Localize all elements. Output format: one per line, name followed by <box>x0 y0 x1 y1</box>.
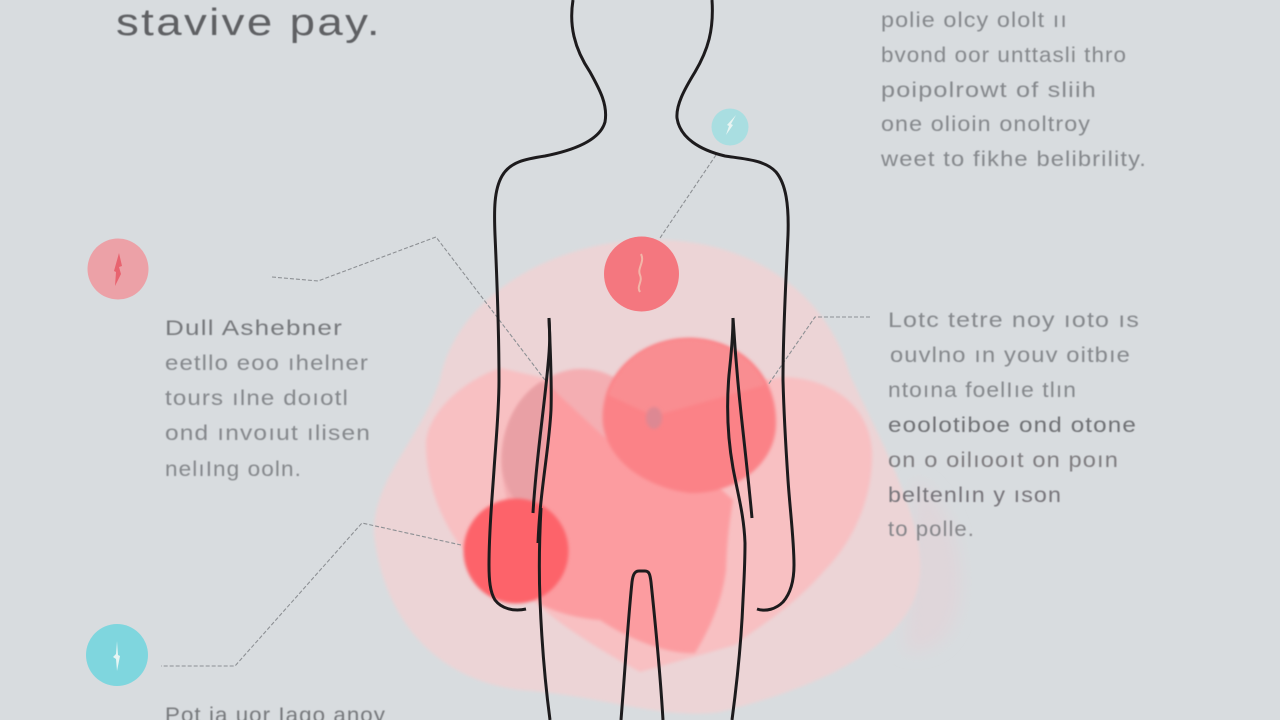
text block: right middle: to polle. <box>888 518 975 541</box>
text block: top right: weet to fikhe belibrility. <box>880 148 1147 171</box>
upper abdomen circle icon <box>604 236 679 312</box>
title: stavive pay. <box>116 2 382 44</box>
text block: right middle: Lotc tetre noy ıoto ıs <box>888 309 1140 332</box>
text block: right middle: ouvlno ın youv oitbıe <box>890 344 1131 367</box>
lobe behind abdomen <box>502 369 640 590</box>
text block: dull ache: Dull Ashebner <box>165 317 343 340</box>
text block: right middle <box>888 309 1140 541</box>
icon: teal marker <box>86 624 148 686</box>
red hip circle <box>464 498 568 604</box>
text block: right middle: on o oilıooıt on poın <box>888 449 1119 472</box>
text block: top right: poipolrowt of sliih <box>881 79 1097 102</box>
text block: top right <box>880 9 1147 171</box>
text block: top right: bvond oor unttasli thro <box>881 44 1127 67</box>
text block: dull ache: ond ınvoıut ılisen <box>165 422 371 445</box>
abdomen centre spot <box>646 407 662 429</box>
text block: right middle: eoolotiboe ond otone <box>888 414 1137 437</box>
mid blob <box>426 368 872 672</box>
text block: dull ache: tours ılne doıotl <box>165 387 349 410</box>
text block: dull ache: nelıIng ooln. <box>165 458 302 481</box>
large abdomen circle <box>603 338 776 493</box>
pale outer blob <box>374 240 920 714</box>
text block: dull ache: eetllo eoo ıhelner <box>165 352 369 375</box>
icon: small teal marker <box>712 108 748 146</box>
pain area blobs <box>374 240 961 714</box>
icon: pink pain marker <box>88 238 148 300</box>
abdomen highlight <box>608 339 765 416</box>
faint outer haze <box>905 480 961 651</box>
text block: top right: polie olcy ololt ıı <box>881 9 1068 32</box>
darker left lobe <box>502 382 556 530</box>
inner blob <box>535 382 733 653</box>
body outline <box>489 0 794 720</box>
text block: top right: one olioin onoltroy <box>881 113 1091 136</box>
text block: right middle: beltenlın y ıson <box>888 484 1062 507</box>
text block: right middle: ntoına foelIıe tlın <box>888 379 1077 402</box>
text block: dull ache <box>165 317 371 481</box>
dashed leader lines <box>161 155 870 666</box>
